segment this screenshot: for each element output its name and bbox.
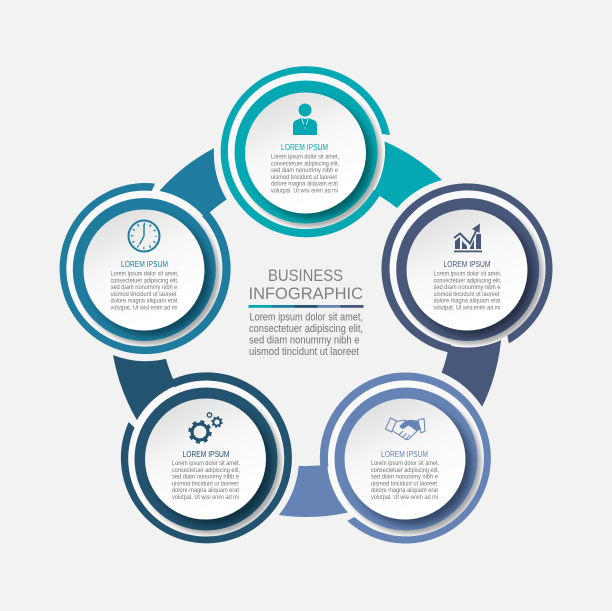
body text: volutpat. Ut wisi enim ad mi (110, 304, 178, 312)
connector and outer ring: teal (221, 66, 442, 237)
body text: dolore magna aliquam erat (371, 487, 438, 494)
body text: Lorem ipsum dolor sit amet, (271, 154, 339, 160)
title: INFOGRAPHIC (248, 284, 363, 303)
body text: Lorem ipsum dolor sit amet, (371, 460, 439, 467)
icon: growth chart (454, 224, 482, 252)
body text: sed diam nonummy nibh e (371, 474, 439, 481)
body text: volutpat. Ut wisi enim ad mi (434, 304, 500, 312)
plate shadow (152, 406, 272, 526)
heading: LOREM IPSUM (121, 259, 168, 269)
center text block (249, 312, 363, 358)
panel: top step (teal) (221, 66, 442, 237)
body text: volutpat. Ut wisi enim ad mi (172, 494, 239, 501)
heading: LOREM IPSUM (182, 449, 230, 459)
disk shadow (77, 202, 219, 344)
plate shadow (352, 406, 472, 526)
body text (110, 270, 179, 312)
connector and outer ring: blue (37, 113, 268, 376)
colour disk (234, 80, 378, 224)
plate shadow (90, 216, 210, 336)
center text block: uismod tincidunt ut laoreet (249, 346, 359, 358)
body text: sed diam nonummy nibh e (172, 474, 240, 481)
heading: LOREM IPSUM (281, 142, 328, 152)
body text: consectetuer adipiscing elit, (434, 277, 502, 284)
panel: bottom left step (navy) (113, 355, 292, 544)
body text: volutpat. Ut wisi enim ad mi (371, 494, 438, 501)
white plate (145, 398, 266, 520)
panel: bottom right step (periwinkle) (279, 372, 491, 544)
heading: LOREM IPSUM (381, 449, 428, 459)
icon: clock (128, 220, 160, 252)
body text: uismod tincidunt ut laoreet (172, 480, 238, 487)
body text: dolore magna aliquam erat (172, 487, 239, 494)
disk shadow (139, 392, 281, 534)
center text block: sed diam nonummy nibh e (249, 334, 360, 346)
body text: dolore magna aliquam erat (110, 298, 178, 305)
body text: dolore magna aliquam erat (271, 181, 338, 188)
title (248, 266, 363, 303)
connector and outer ring: slate (359, 161, 590, 424)
body text: uismod tincidunt ut laoreet (434, 291, 500, 298)
connector and outer ring: periwinkle (245, 339, 525, 607)
icon: gears (190, 413, 222, 442)
connector and outer ring: navy (46, 309, 326, 577)
center text block: Lorem ipsum dolor sit amet, (250, 312, 363, 324)
panel: right step (slate) (382, 183, 552, 407)
body text: consectetuer adipiscing elit, (172, 467, 240, 474)
body text: Lorem ipsum dolor sit amet, (172, 460, 240, 467)
body text: consectetuer adipiscing elit, (371, 467, 439, 474)
colour disk (396, 198, 539, 341)
body text: uismod tincidunt ut laoreet (271, 174, 337, 181)
title: BUSINESS (268, 266, 343, 285)
white plate (344, 398, 466, 520)
disk shadow (239, 85, 381, 227)
heading: LOREM IPSUM (444, 259, 490, 269)
plate shadow (414, 216, 534, 336)
body text: Lorem ipsum dolor sit amet, (110, 270, 179, 278)
colour bar divider (248, 305, 364, 308)
disk shadow (339, 392, 481, 534)
body text: uismod tincidunt ut laoreet (371, 480, 437, 487)
panel: left step (blue) (60, 148, 231, 354)
title block (248, 266, 364, 358)
body text: Lorem ipsum dolor sit amet, (434, 270, 502, 278)
body text (434, 270, 502, 312)
body text: consectetuer adipiscing elit, (271, 160, 339, 167)
body text: sed diam nonummy nibh e (434, 284, 501, 291)
white plate (84, 210, 204, 330)
colour disk (73, 198, 216, 341)
body text: dolore magna aliquam erat (434, 298, 501, 305)
icon: businessman (293, 104, 317, 135)
colour disk (134, 388, 278, 530)
center text block: consectetuer adipiscing elit, (249, 323, 363, 335)
icon: handshake (386, 418, 425, 440)
white plate (406, 210, 528, 330)
body text: sed diam nonummy nibh e (110, 284, 178, 291)
plate shadow (252, 99, 372, 219)
body text: sed diam nonummy nibh e (271, 167, 339, 174)
body text (271, 154, 339, 194)
body text: volutpat. Ut wisi enim ad mi (271, 188, 338, 194)
disk shadow (401, 202, 543, 344)
white plate (245, 92, 366, 214)
body text (172, 460, 240, 501)
body text (371, 460, 439, 501)
body text: consectetuer adipiscing elit, (110, 277, 179, 284)
body text: uismod tincidunt ut laoreet (110, 291, 177, 298)
light centres behind the circles (64, 71, 548, 538)
colour disk (334, 388, 478, 530)
